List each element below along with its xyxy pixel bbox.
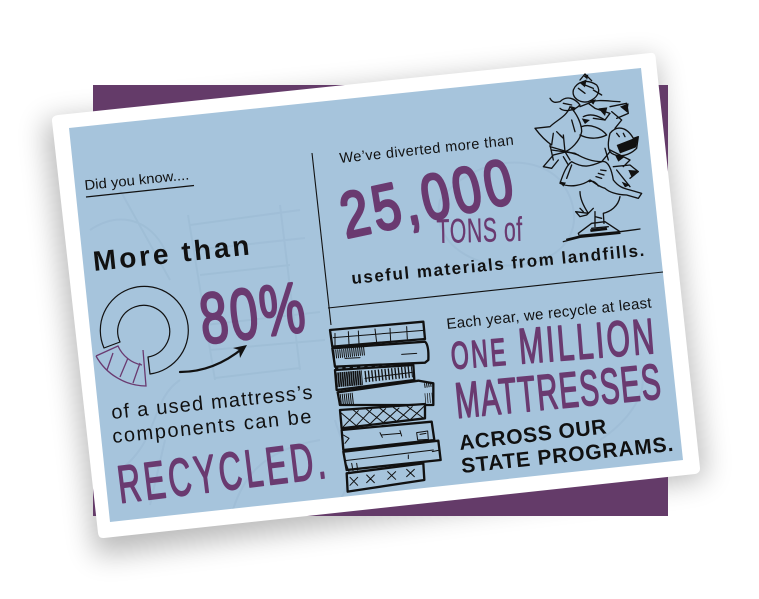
donut purple section (96, 346, 146, 386)
heading: tons of: TONS of (436, 210, 523, 250)
text: useful materials from landfills: useful materials from landfills. (351, 241, 645, 288)
text: of a used mattress's components can be (110, 382, 313, 448)
donut black section (100, 286, 188, 374)
faint background sketch (232, 496, 343, 509)
white card (52, 53, 700, 538)
heading: recycled: RECYCLED. (114, 431, 329, 515)
icon: stack of elephants on a scale (535, 74, 642, 242)
chart: donut showing 80 percent (96, 286, 188, 386)
text: of a used mattress's components can be: components can be (111, 406, 312, 448)
stat: 80 percent: 80% (195, 268, 309, 360)
blue panel (69, 68, 683, 522)
card shadow (44, 58, 706, 556)
lower mattresses (340, 404, 441, 492)
mattress hatching (334, 351, 433, 400)
text: did you know: Did you know.... (84, 166, 190, 193)
purple backing rectangle (93, 85, 668, 516)
text: each year we recycle at least: Each year, we recycle at least (446, 294, 653, 333)
text: across our state programs: STATE PROGRAMS. (460, 433, 674, 478)
text: of a used mattress's components can be: of a used mattress’s (110, 382, 313, 424)
upper elephants (535, 74, 638, 160)
heading: mattresses: MATTRESSES (453, 353, 663, 429)
text: across our state programs: ACROSS OUR (458, 415, 608, 455)
section dividers (312, 153, 663, 325)
arrow (180, 345, 247, 372)
stat: 25,000: 25,000 (334, 146, 519, 252)
upper mattresses (330, 322, 433, 405)
lower elephants (543, 150, 642, 242)
heading: more than: More than (91, 230, 251, 277)
icon: stack of mattresses (330, 322, 441, 492)
text: we've diverted more than: We’ve diverted more than (339, 133, 514, 167)
heading: one million: ONE MILLION (448, 308, 656, 380)
